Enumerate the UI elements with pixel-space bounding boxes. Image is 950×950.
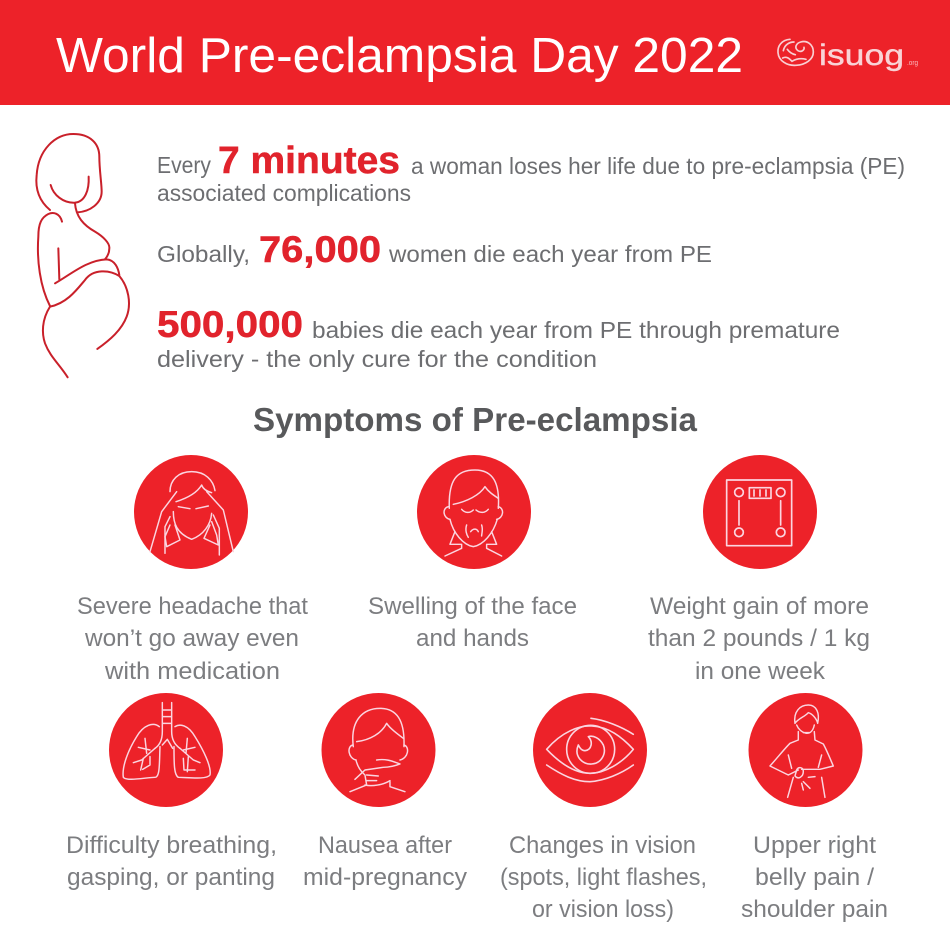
isuog logo: .org [907,60,918,67]
statistic: 7 minutes: Every [157,152,211,178]
statistic: 500,000: delivery - the only cure for the condition [157,346,597,372]
statistic: 7 minutes: a woman loses her life due to pre-eclampsia (PE) [411,153,905,179]
label: and hands [416,625,529,652]
label [648,593,870,685]
title: World Pre-eclampsia Day 2022 [56,29,743,83]
label: in one week [695,658,826,685]
symptom: nausea [303,693,468,891]
isuog logo [778,39,918,72]
icon: swollen face [417,455,531,569]
icon: nausea [322,693,436,807]
symptom: swelling [368,455,577,652]
heading: symptoms: Symptoms of Pre-eclampsia [253,401,698,438]
label: or vision loss) [532,896,674,923]
icon: lungs [109,693,223,807]
label: Nausea after [318,832,452,859]
statistic: 7 minutes: 7 minutes [218,140,400,182]
statistic: 76,000: Globally, [157,241,250,267]
label: (spots, light flashes, [500,864,707,891]
label: Difficulty breathing, [66,832,277,859]
symptom: difficulty breathing [66,693,277,891]
label: Changes in vision [509,832,696,859]
icon: pregnant woman outline [36,134,129,377]
statistic: 76,000: 76,000 [259,229,381,270]
label: Severe headache that [77,593,308,620]
statistic: 500,000 [157,304,840,372]
label [500,832,707,923]
label: shoulder pain [741,896,888,923]
label [66,832,277,891]
label: than 2 pounds / 1 kg [648,625,870,652]
label: with medication [104,658,280,685]
statistic: 7 minutes: associated complications [157,180,411,206]
header banner [0,0,950,105]
icon: woman holding belly [748,693,862,807]
label: Weight gain of more [650,593,869,620]
label: Swelling of the face [368,593,577,620]
label [368,593,577,652]
label: belly pain / [755,864,874,891]
icon: eye [533,693,647,807]
label: Upper right [753,832,876,859]
symptom: severe headache [77,455,308,685]
label: won’t go away even [84,625,299,652]
statistic: 76,000 [157,229,712,270]
symptom: vision changes [500,693,707,923]
label [741,832,888,923]
statistic: 76,000: women die each year from PE [388,241,712,267]
label [77,593,308,685]
isuog logo: isuog [819,39,904,72]
label: mid-pregnancy [303,864,468,891]
statistic: 500,000: 500,000 [157,304,303,345]
statistic: 7 minutes [157,140,905,206]
label [303,832,468,891]
icon: bathroom scale [703,455,817,569]
icon: headache [134,455,248,569]
symptom: weight gain [648,455,870,685]
symptom: upper belly pain [741,693,888,923]
statistic: 500,000: babies die each year from PE through premature [312,317,840,343]
label: gasping, or panting [67,864,275,891]
